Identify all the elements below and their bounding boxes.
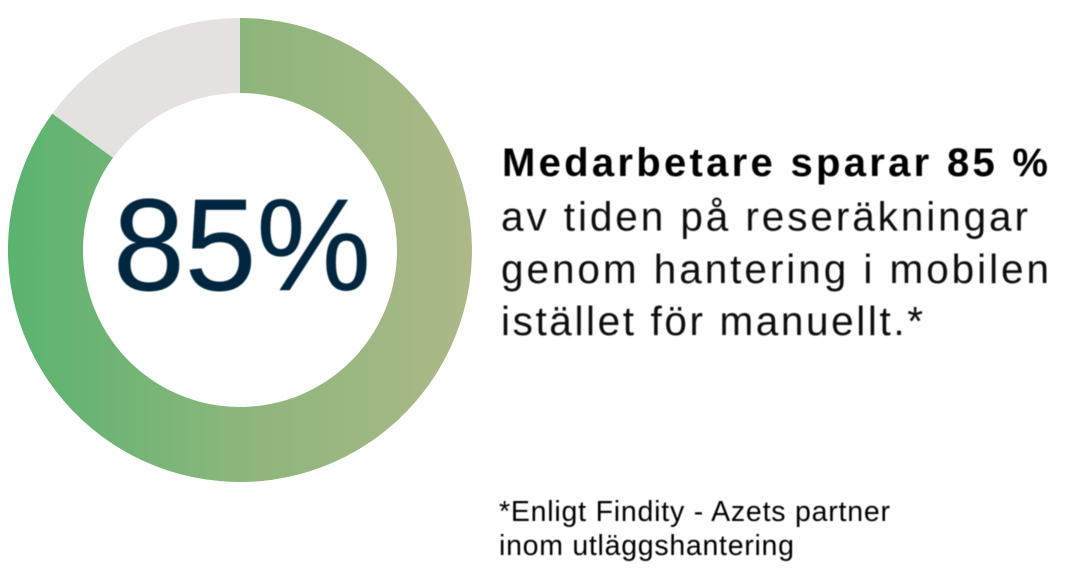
body line 3: istället för manuellt.* [501, 298, 923, 344]
donut segment: remaining 15 percent grey [52, 18, 240, 158]
footnote [499, 496, 890, 562]
main statement text [501, 141, 1049, 344]
bold heading line: Medarbetare sparar 85 % [502, 141, 1048, 185]
footnote line 2: inom utläggshantering [499, 530, 794, 562]
donut segment: 85 percent green [8, 18, 472, 482]
footnote line 1: *Enligt Findity - Azets partner [499, 496, 890, 528]
body line 1: av tiden på reseräkningar [501, 194, 1028, 240]
big number in donut: 85% [113, 171, 371, 318]
donut chart: 85 percent [8, 18, 472, 482]
body line 2: genom hantering i mobilen [501, 246, 1049, 292]
